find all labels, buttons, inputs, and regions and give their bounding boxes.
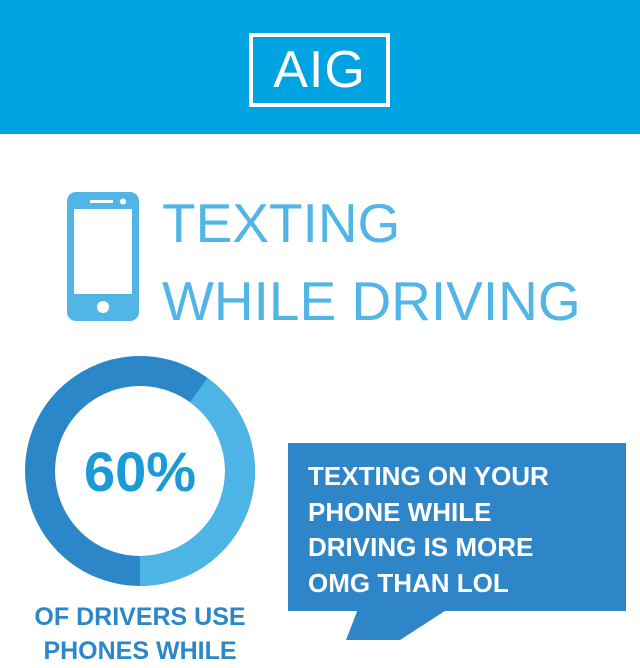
stat caption: OF DRIVERS USE xyxy=(34,603,246,631)
callout text: TEXTING ON YOUR xyxy=(308,461,549,491)
callout text: DRIVING IS MORE xyxy=(308,532,533,562)
title: TEXTING xyxy=(162,192,400,254)
stat value: 60% xyxy=(84,440,196,503)
stat caption: PHONES WHILE xyxy=(43,637,237,665)
icon: phone xyxy=(67,192,139,321)
donut chart: 60% xyxy=(25,356,255,586)
logo: AIG: AIG xyxy=(273,41,366,99)
title: WHILE DRIVING xyxy=(162,270,581,332)
logo: AIG xyxy=(249,33,390,107)
stat caption xyxy=(34,603,246,665)
callout text: PHONE WHILE xyxy=(308,496,491,526)
header band xyxy=(0,0,640,134)
callout text: OMG THAN LOL xyxy=(308,568,509,598)
title xyxy=(162,192,581,332)
callout speech bubble xyxy=(288,443,626,640)
callout text xyxy=(308,461,549,598)
